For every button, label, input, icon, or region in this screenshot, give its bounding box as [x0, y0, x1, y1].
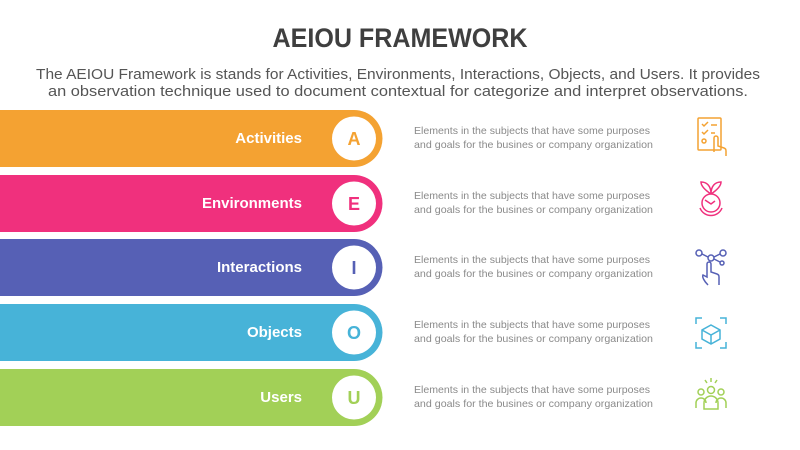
bar: Environments: Environments [202, 195, 302, 212]
bar: Activities: Activities [235, 130, 302, 147]
bar: Users: U [348, 388, 360, 408]
icon: globe with leaves [700, 182, 722, 216]
icon: users group [696, 378, 726, 409]
icon: checklist with hand [698, 118, 726, 156]
bar: Environments [0, 175, 382, 232]
title: AEIOU FRAMEWORK [272, 23, 528, 53]
bar: Interactions: Interactions [217, 259, 302, 276]
bar: Objects: O [347, 323, 361, 343]
bar: Environments: E [348, 194, 360, 214]
descriptions: Elements in the subjects that have some purposes [414, 125, 650, 137]
descriptions: and goals for the busines or company organization [414, 204, 653, 216]
descriptions: Elements in the subjects that have some purposes [414, 384, 650, 396]
icon: cube in frame [696, 318, 726, 348]
bar: Activities: A [348, 129, 360, 149]
bar: Users: Users [260, 389, 302, 406]
descriptions: and goals for the busines or company organization [414, 333, 653, 345]
icon: hand with network [696, 250, 726, 285]
subtitle: The AEIOU Framework is stands for Activities, Environments, Interactions, Objects, and Users. It provides [36, 67, 760, 83]
descriptions [414, 125, 653, 410]
bar: Objects [0, 304, 382, 361]
bar: Users [0, 369, 382, 426]
descriptions: Elements in the subjects that have some purposes [414, 319, 650, 331]
subtitle: an observation technique used to document contextual for categorize and interpret observations. [48, 84, 748, 100]
bar: Activities [0, 110, 382, 167]
bar: Interactions [0, 239, 382, 296]
descriptions: Elements in the subjects that have some purposes [414, 254, 650, 266]
subtitle [36, 67, 760, 100]
descriptions: Elements in the subjects that have some purposes [414, 190, 650, 202]
descriptions: and goals for the busines or company organization [414, 139, 653, 151]
bar: Objects: Objects [247, 324, 302, 341]
descriptions: and goals for the busines or company organization [414, 398, 653, 410]
descriptions: and goals for the busines or company organization [414, 268, 653, 280]
bar: Interactions: I [351, 258, 357, 278]
